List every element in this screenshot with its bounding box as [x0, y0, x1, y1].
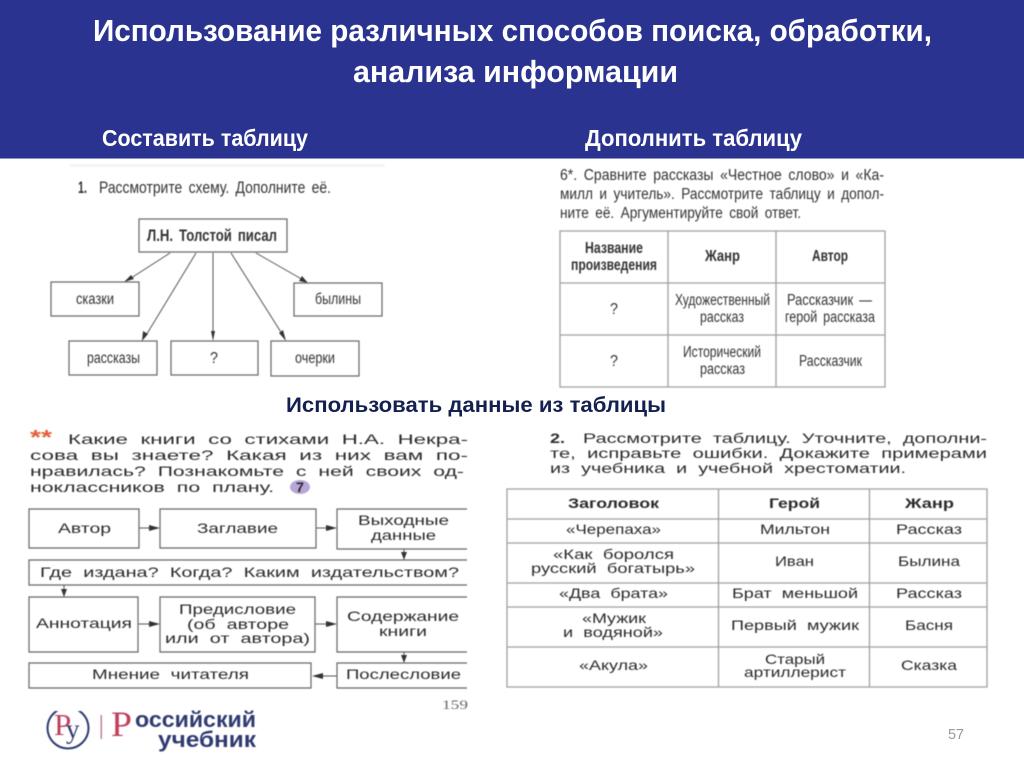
flow box labels: Предисловие — [179, 601, 296, 617]
table text: ? — [610, 353, 618, 370]
task text: Рассмотрите таблицу. Уточните, дополни- — [583, 430, 987, 446]
table text: русский богатырь» — [531, 560, 695, 576]
task text: Какие книги со стихами Н.А. Некра- — [68, 431, 469, 447]
table text: Мильтон — [760, 521, 830, 537]
panel: compare stories table — [560, 167, 885, 387]
table text: рассказ — [700, 361, 745, 378]
task text — [30, 431, 469, 495]
table text: артиллерист — [744, 664, 847, 680]
flow box labels: данные — [371, 527, 436, 543]
logo: Russian Textbook — [40, 704, 257, 752]
task text: нравилась? Познакомьте с ней своих од- — [30, 463, 464, 479]
node: question — [171, 341, 258, 375]
node: question: ? — [210, 350, 218, 367]
table text — [571, 240, 875, 378]
table text: Заголовок — [568, 495, 660, 511]
flow box labels: Аннотация — [36, 615, 132, 631]
node: tales — [51, 282, 139, 316]
table grid — [560, 231, 885, 387]
table text: «Мужик — [582, 610, 647, 626]
table text: и водяной» — [563, 624, 663, 640]
table text: «Акула» — [579, 657, 648, 673]
table text: Сказка — [901, 657, 957, 673]
table text: Рассказчик — — [787, 292, 872, 309]
table text: Басня — [905, 617, 953, 633]
task text: из учебника и учебной хрестоматии. — [550, 460, 906, 476]
task text — [550, 430, 987, 476]
flow box labels: Где издана? Когда? Каким издательством? — [40, 564, 459, 580]
header banner — [0, 0, 1024, 159]
flow box labels: Содержание — [347, 608, 459, 624]
heading: use table data: Использовать данные из таблицы — [286, 394, 666, 417]
task text: те, исправьте ошибки. Докажите примерами — [550, 445, 987, 461]
table text: Жанр — [704, 248, 740, 265]
table text: «Как боролся — [553, 546, 674, 562]
node: stories — [69, 341, 157, 375]
panel: Tolstoy scheme — [51, 164, 385, 376]
table text: Исторический — [683, 344, 761, 361]
node: byliny — [294, 283, 382, 316]
logo emblem: Р — [54, 707, 71, 742]
panel: Nekrasov flow chart — [29, 427, 469, 712]
table text: Рассказчик — [799, 353, 862, 370]
table grid — [507, 489, 987, 687]
table text: рассказ — [700, 309, 744, 326]
logo wordmark: учебник — [158, 727, 257, 752]
slide number: 57 — [948, 727, 964, 743]
table text: Рассказ — [896, 521, 962, 537]
logo emblem: у — [66, 714, 80, 744]
logo wordmark: Р — [111, 704, 132, 744]
page number 159: 159 — [442, 697, 468, 712]
flow box labels: Послесловие — [346, 666, 461, 682]
flow box labels: Заглавие — [197, 520, 278, 536]
table text: Автор — [812, 248, 848, 265]
flow box labels: Автор — [58, 520, 111, 536]
panel: literature table — [507, 430, 987, 687]
node: essays — [271, 341, 359, 376]
flow box labels: или от автора) — [165, 630, 310, 646]
stars: ** — [30, 427, 52, 449]
table text: Первый мужик — [731, 617, 860, 633]
task text: 2. — [550, 430, 565, 446]
node: Tolstoy: Л.Н. Толстой писал — [147, 227, 277, 245]
table text: Брат меньшой — [732, 585, 858, 601]
task text: Рассмотрите схему. Дополните её. — [99, 178, 331, 197]
logo emblem — [40, 704, 96, 748]
node: byliny: былины — [315, 291, 361, 308]
table text: Название — [585, 240, 643, 257]
logo wordmark: оссийский — [135, 707, 256, 732]
task text: ноклассников по плану. — [30, 479, 274, 495]
task text: ните её. Аргументируйте свой ответ. — [560, 205, 801, 222]
task text: сова вы знаете? Какая из них вам по- — [30, 447, 469, 463]
task text — [560, 167, 884, 222]
title: анализа информации — [353, 54, 678, 89]
table text: «Черепаха» — [566, 521, 661, 537]
table text: Былина — [898, 553, 960, 569]
flow arrows — [61, 525, 407, 679]
node: stories: рассказы — [87, 350, 140, 367]
table text: Герой — [769, 495, 820, 511]
badge 7 — [290, 479, 310, 495]
heading: complete a table: Дополнить таблицу — [585, 125, 802, 151]
task text: 1. — [78, 178, 87, 197]
flow box labels: книги — [379, 623, 427, 639]
table text: произведения — [571, 257, 657, 274]
arrows — [124, 253, 308, 341]
table text: Жанр — [904, 495, 954, 511]
title — [93, 13, 932, 89]
flow box labels: Выходные — [358, 512, 449, 528]
flow box labels: Мнение читателя — [92, 666, 249, 682]
table text: Иван — [775, 553, 814, 569]
heading: compose a table: Составить таблицу — [102, 125, 308, 151]
table text: Старый — [765, 651, 825, 667]
table text: Рассказ — [896, 585, 962, 601]
badge 7: 7 — [296, 479, 304, 495]
table text: «Два брата» — [559, 585, 668, 601]
table text: Художественный — [675, 292, 770, 309]
flow box labels — [36, 512, 461, 682]
node: essays: очерки — [295, 350, 335, 367]
logo divider — [100, 715, 102, 739]
flow box labels: (об авторе — [187, 616, 289, 632]
node: Tolstoy — [139, 219, 287, 252]
flow boxes — [29, 509, 467, 688]
task text: милл и учитель». Рассмотрите таблицу и допол- — [560, 186, 884, 203]
table text — [531, 495, 962, 680]
title: Использование различных способов поиска, обработки, — [93, 13, 932, 48]
table text: ? — [610, 301, 618, 318]
logo wordmark — [111, 704, 257, 752]
task text: 6*. Сравните рассказы «Честное слово» и «Ка- — [560, 167, 884, 184]
node: tales: сказки — [76, 291, 114, 308]
table text: герой рассказа — [785, 309, 875, 326]
